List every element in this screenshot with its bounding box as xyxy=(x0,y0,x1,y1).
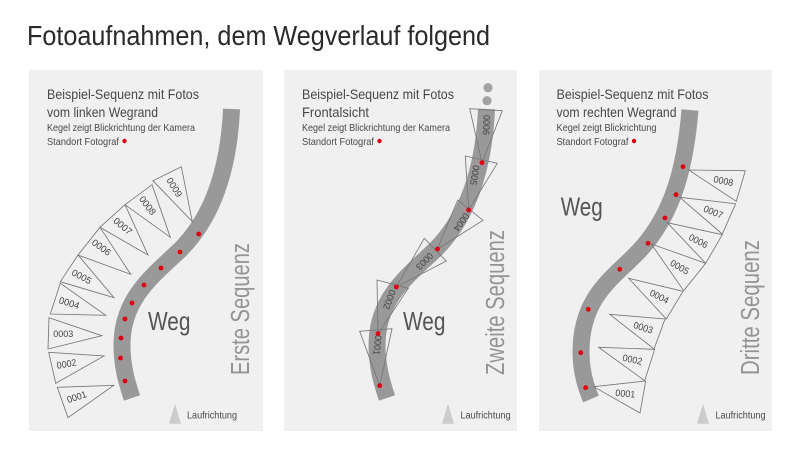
path: road xyxy=(377,109,486,398)
legend dot: photographer xyxy=(122,139,127,143)
subheading: panel 2: Frontalsicht xyxy=(302,104,369,120)
photographer positions xyxy=(578,164,685,390)
cone numbers: 0008 xyxy=(136,194,158,218)
cone numbers xyxy=(370,115,492,355)
title: Fotoaufnahmen, dem Wegverlauf folgend xyxy=(27,20,490,51)
panel: erste Sequenz xyxy=(29,70,263,431)
heading: panel 1: Beispiel-Sequenz mit Fotos xyxy=(47,86,199,102)
subheading: panel 1: vom linken Wegrand xyxy=(47,104,158,120)
cone numbers: 0007 xyxy=(111,216,134,238)
path: road xyxy=(122,109,232,398)
icon: walking direction xyxy=(697,404,709,424)
note: photographer position: Standort Fotograf xyxy=(302,136,374,148)
cone numbers: 0003 xyxy=(413,250,435,272)
cone numbers: 0006 xyxy=(687,232,709,251)
road label: Weg xyxy=(148,306,190,336)
sequence label: Erste Sequenz xyxy=(227,243,255,375)
cone numbers xyxy=(615,174,734,401)
view cones xyxy=(360,109,502,386)
road label: Weg xyxy=(561,192,603,222)
cone numbers: 0005 xyxy=(467,164,481,186)
cone numbers: 0004 xyxy=(648,288,670,307)
cone numbers: 0004 xyxy=(57,295,81,312)
cone numbers: 0004 xyxy=(450,210,471,233)
note: cone meaning: Kegel zeigt Blickrichtung der Kamera xyxy=(302,122,450,134)
cone numbers: 0002 xyxy=(380,288,397,311)
cone numbers: 0009 xyxy=(163,176,184,200)
cone numbers: 0005 xyxy=(69,268,93,287)
cone numbers: 0006 xyxy=(89,237,113,259)
heading: panel 3: Beispiel-Sequenz mit Fotos xyxy=(556,86,708,102)
cone numbers: 0008 xyxy=(712,174,734,189)
cone numbers: 0001 xyxy=(66,389,88,406)
sequence label: Zweite Sequenz xyxy=(482,230,510,375)
cone numbers xyxy=(53,176,184,406)
legend: walking direction: Laufrichtung xyxy=(460,410,511,422)
cone numbers: 0005 xyxy=(668,258,691,277)
panel: dritte Sequenz xyxy=(539,70,772,431)
note: photographer position: Standort Fotograf xyxy=(556,136,629,148)
panel: zweite Sequenz xyxy=(284,70,517,431)
path: road xyxy=(581,110,690,399)
continuation dots xyxy=(482,83,493,105)
heading: panel 2: Beispiel-Sequenz mit Fotos xyxy=(302,86,454,102)
cone numbers: 0001 xyxy=(615,388,636,401)
sequence label: Dritte Sequenz xyxy=(737,240,765,375)
icon: walking direction xyxy=(442,404,454,424)
icon: walking direction xyxy=(169,404,181,424)
photographer positions xyxy=(376,160,484,388)
note: cone meaning: Kegel zeigt Blickrichtung xyxy=(556,122,657,134)
cone numbers: 0002 xyxy=(56,358,78,372)
view cones xyxy=(594,170,745,413)
cone numbers: 0006 xyxy=(480,115,492,135)
legend: walking direction: Laufrichtung xyxy=(716,410,766,422)
cone numbers: 0007 xyxy=(702,204,724,222)
photographer positions xyxy=(118,232,201,383)
cone numbers: 0003 xyxy=(632,320,654,336)
legend: walking direction: Laufrichtung xyxy=(187,410,237,422)
subheading: panel 3: vom rechten Wegrand xyxy=(556,104,676,120)
note: photographer position: Standort Fotograf xyxy=(47,136,119,148)
cone numbers: 0002 xyxy=(621,353,643,368)
cone numbers: 0003 xyxy=(53,329,73,340)
note: cone meaning: Kegel zeigt Blickrichtung der Kamera xyxy=(47,122,195,134)
legend dot: photographer xyxy=(377,139,382,143)
road label: Weg xyxy=(403,306,446,336)
cone numbers: 0001 xyxy=(370,335,383,355)
legend dot: photographer xyxy=(632,139,636,143)
view cones xyxy=(48,167,192,418)
